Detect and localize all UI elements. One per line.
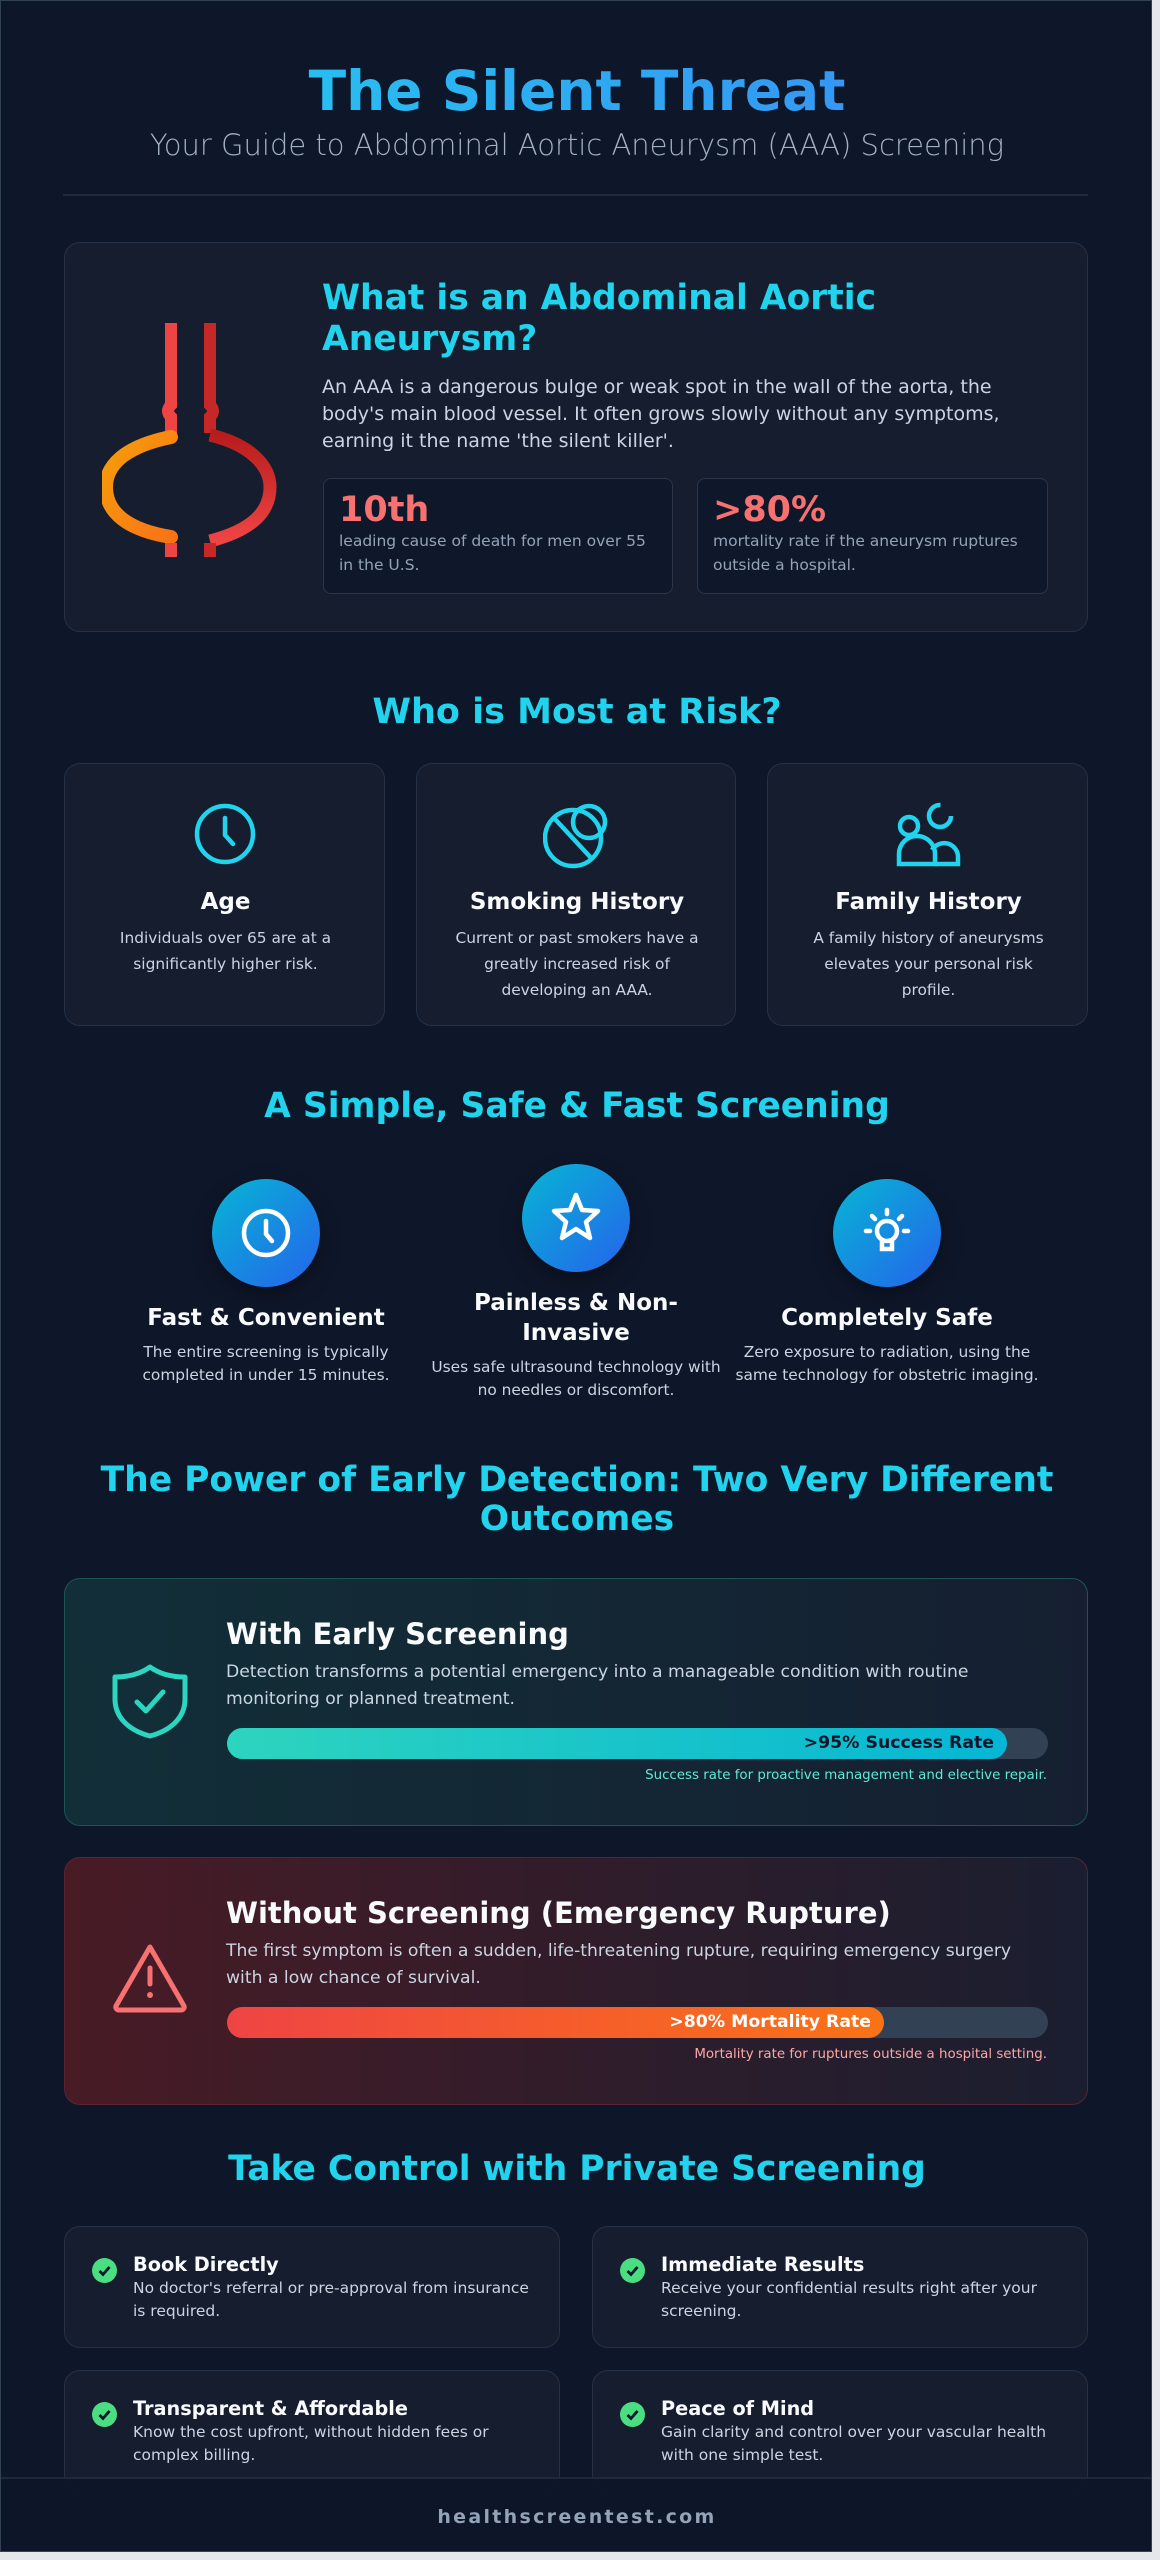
bar chart: success — [227, 1728, 1048, 1759]
heading — [322, 278, 876, 359]
stat: 10th — [323, 478, 673, 594]
feature: painless: Uses safe ultrasound technology with — [431, 1358, 721, 1376]
panel: smoking: greatly increased risk of — [484, 955, 670, 973]
heading: risk: Who is Most at Risk? — [372, 692, 782, 732]
card: transparent: complex billing. — [133, 2446, 255, 2464]
icon: check — [620, 2402, 645, 2427]
card: immediate results: Immediate Results — [661, 2253, 864, 2276]
feature: fast: The entire screening is typically — [143, 1343, 389, 1361]
panel: age: significantly higher risk. — [133, 955, 318, 973]
title — [1, 57, 1153, 125]
card: book directly: Book Directly — [133, 2253, 279, 2276]
icon: family — [896, 802, 960, 866]
card: peace of mind — [592, 2370, 1088, 2492]
stat: 80%: mortality rate if the aneurysm ruptures — [713, 532, 1018, 550]
feature: fast — [142, 1179, 390, 1384]
panel: with screening: monitoring or planned treatment. — [226, 1689, 515, 1709]
panel: without screening: with a low chance of survival. — [226, 1968, 481, 1988]
icon: bulb circle — [833, 1179, 941, 1287]
feature: fast: completed in under 15 minutes. — [142, 1366, 390, 1384]
feature: safe: same technology for obstetric imaging. — [735, 1366, 1039, 1384]
bar chart: mortality — [227, 2007, 1048, 2038]
card: peace of mind: Peace of Mind — [661, 2397, 814, 2420]
footer — [1, 2477, 1153, 2553]
stat: 80% — [697, 478, 1048, 594]
panel: without screening — [64, 1857, 1088, 2105]
panel: without screening: The first symptom is often a sudden, life-threatening rupture, requiring emergency surgery — [226, 1941, 1011, 1961]
panel: family — [767, 763, 1088, 1026]
subtitle: Your Guide to Abdominal Aortic Aneurysm (AAA) Screening — [150, 128, 1004, 162]
card: peace of mind: Gain clarity and control over your vascular health — [661, 2423, 1046, 2441]
panel: without screening: Mortality rate for ruptures outside a hospital setting. — [694, 2047, 1047, 2062]
icon: check — [92, 2402, 117, 2427]
stat: 80%: outside a hospital. — [713, 556, 856, 574]
feature: painless: Painless & Non- — [474, 1290, 678, 1316]
icon: star circle — [522, 1164, 630, 1272]
card: transparent: Transparent & Affordable — [133, 2397, 408, 2420]
panel: family: A family history of aneurysms — [813, 929, 1044, 947]
panel: family: profile. — [902, 981, 955, 999]
card: immediate results: screening. — [661, 2302, 741, 2320]
icon: check — [92, 2258, 117, 2283]
panel: smoking: Smoking History — [470, 889, 684, 915]
icon: clock — [194, 804, 256, 864]
heading: Aneurysm? — [322, 319, 537, 359]
bar chart: mortality: >80% Mortality Rate — [669, 2012, 871, 2032]
footer: healthscreentest.com — [437, 2506, 717, 2528]
feature: painless: Invasive — [522, 1320, 630, 1346]
panel: family: elevates your personal risk — [824, 955, 1033, 973]
card: peace of mind: with one simple test. — [661, 2446, 823, 2464]
heading: screening: A Simple, Safe & Fast Screening — [264, 1086, 890, 1126]
panel: age: Individuals over 65 are at a — [120, 929, 331, 947]
stat: 10th: in the U.S. — [339, 556, 419, 574]
heading: take control: Take Control with Private Screening — [228, 2149, 926, 2189]
feature: safe: Completely Safe — [781, 1305, 993, 1331]
panel: with screening: With Early Screening — [226, 1617, 569, 1651]
icon: check — [620, 2258, 645, 2283]
panel: with screening: Success rate for proactive management and elective repair. — [645, 1768, 1047, 1783]
heading: early detection — [100, 1460, 1053, 1539]
card: immediate results: Receive your confidential results right after your — [661, 2279, 1037, 2297]
panel: without screening: Without Screening (Emergency Rupture) — [226, 1896, 891, 1930]
icon: warning — [113, 1944, 187, 2012]
feature: safe: Zero exposure to radiation, using the — [744, 1343, 1030, 1361]
text block: body's main blood vessel. It often grows slowly without any symptoms, — [322, 403, 1000, 425]
panel: with screening — [64, 1578, 1088, 1826]
stat: 80%: >80% — [713, 490, 826, 530]
feature: safe — [735, 1179, 1039, 1384]
text block: An AAA is a dangerous bulge or weak spot in the wall of the aorta, the — [322, 376, 992, 398]
feature: painless — [431, 1164, 721, 1399]
title: The Silent Threat — [309, 59, 845, 123]
icon: aorta — [102, 323, 276, 557]
card: transparent — [64, 2370, 560, 2492]
card: book directly: is required. — [133, 2302, 220, 2320]
panel: smoking — [416, 763, 736, 1026]
heading: early detection: The Power of Early Detection: Two Very Different — [101, 1460, 1053, 1500]
heading: What is an Abdominal Aortic — [322, 278, 876, 318]
heading: early detection: Outcomes — [480, 1499, 674, 1539]
card: book directly: No doctor's referral or pre-approval from insurance — [133, 2279, 529, 2297]
text block: earning it the name 'the silent killer'. — [322, 430, 674, 452]
icon: clock circle — [212, 1179, 320, 1287]
text block — [322, 376, 1000, 452]
icon: no smoking — [543, 804, 608, 868]
card: transparent: Know the cost upfront, without hidden fees or — [133, 2423, 489, 2441]
panel: family: Family History — [835, 889, 1022, 915]
panel: age: Age — [201, 889, 250, 915]
card: book directly — [64, 2226, 560, 2348]
feature: painless: no needles or discomfort. — [478, 1381, 674, 1399]
stat: 10th: leading cause of death for men over 55 — [339, 532, 646, 550]
panel: what is AAA — [64, 242, 1088, 632]
icon: shield — [112, 1664, 188, 1738]
card: immediate results — [592, 2226, 1088, 2348]
feature: fast: Fast & Convenient — [147, 1305, 385, 1331]
panel: smoking: developing an AAA. — [501, 981, 653, 999]
stat: 10th: 10th — [339, 490, 429, 530]
bar chart: success: >95% Success Rate — [804, 1733, 994, 1753]
panel: smoking: Current or past smokers have a — [455, 929, 699, 947]
panel: age — [64, 763, 385, 1026]
panel: with screening: Detection transforms a potential emergency into a manageable condition with routine — [226, 1662, 968, 1682]
